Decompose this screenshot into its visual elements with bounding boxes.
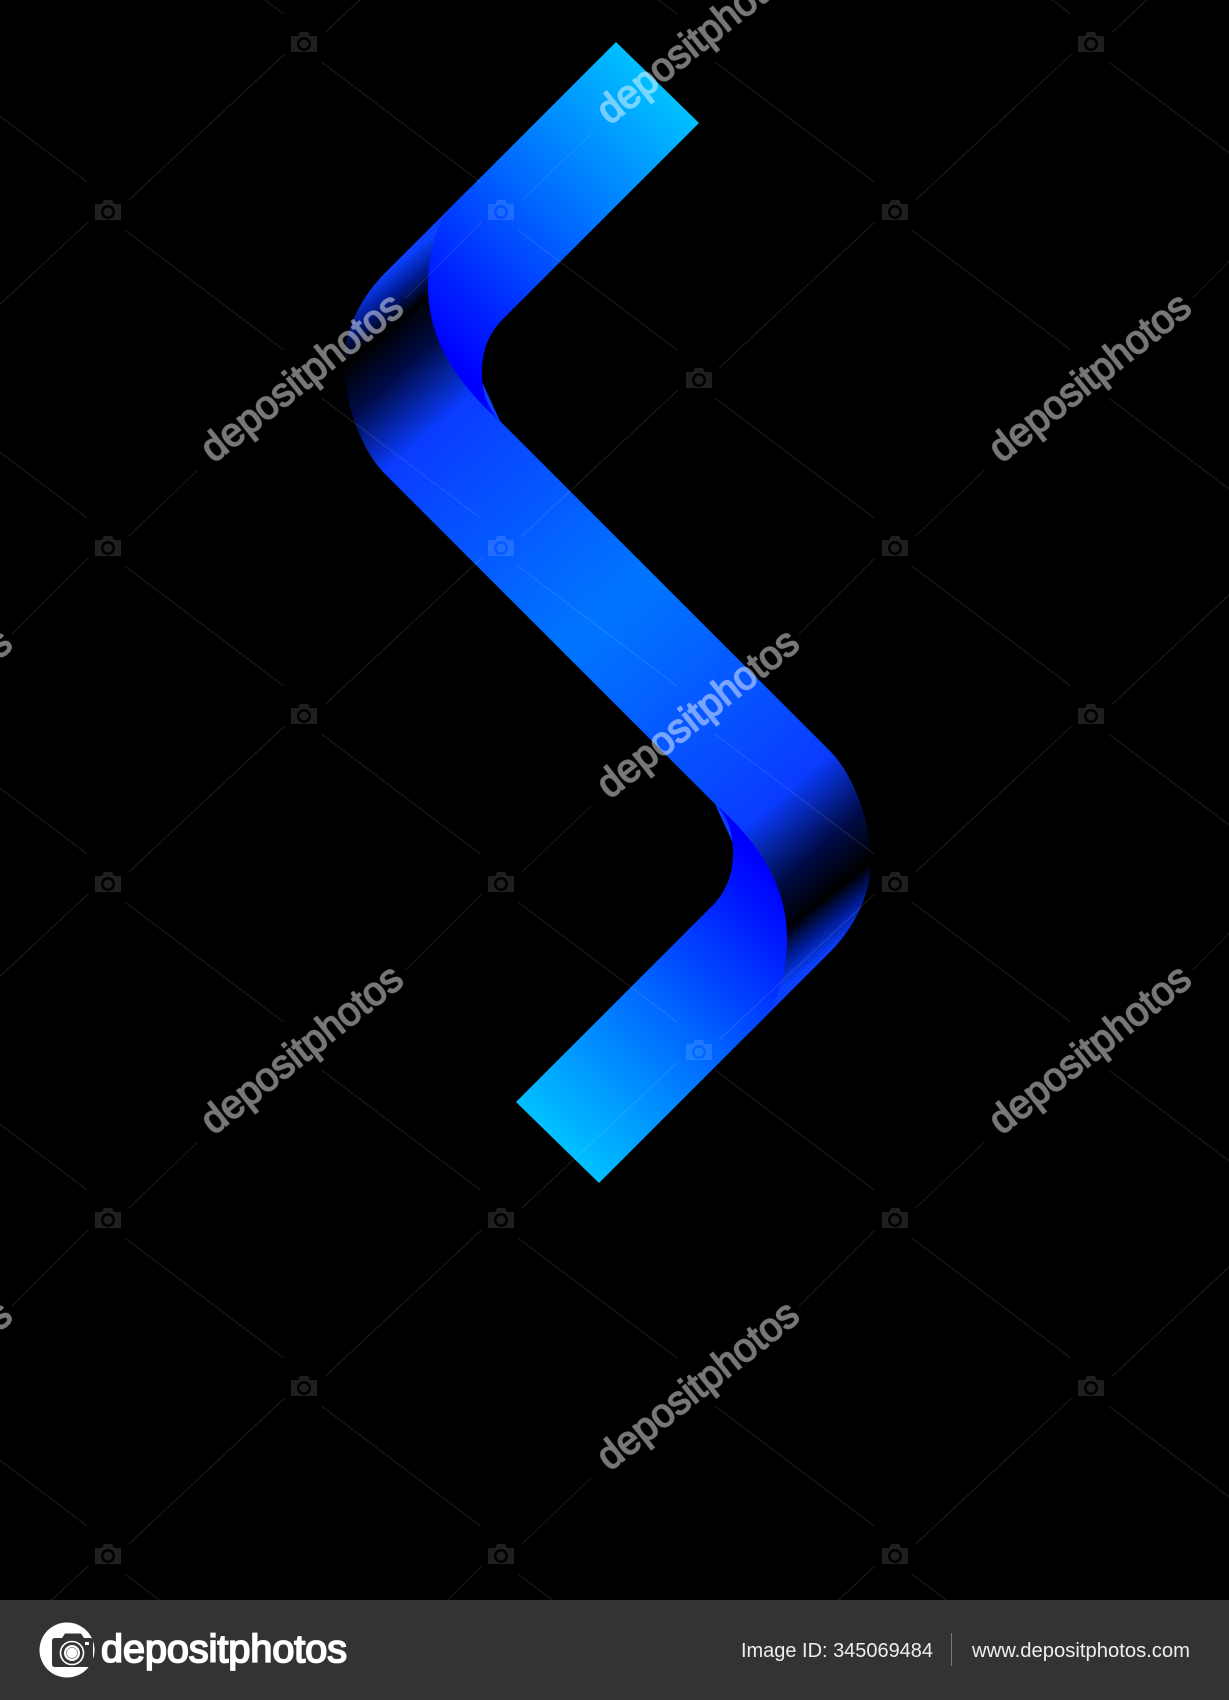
watermark wordmarks: depositphotos [980, 956, 1199, 1143]
front arm, upper [428, 42, 699, 421]
lower half of ribbon [516, 570, 871, 1183]
watermark camera icons [95, 32, 1104, 1564]
back fold, lower [745, 860, 871, 1037]
website address: www.depositphotos.com [971, 1640, 1190, 1662]
front arm, lower [516, 804, 787, 1183]
watermark wordmarks: depositphotos [192, 284, 411, 471]
image id: Image ID: 345069484 [741, 1640, 933, 1662]
middle band, upper half [344, 290, 650, 656]
watermark wordmarks: depositphotos [980, 284, 1199, 471]
ribbon rune [344, 42, 871, 1183]
back fold, upper [344, 188, 470, 365]
watermark wordmarks: depositphotos [588, 620, 807, 807]
footer band [0, 1600, 1229, 1700]
upper half of ribbon [344, 42, 699, 656]
watermark wordmarks: depositphotos [192, 956, 411, 1143]
middle band, lower half [564, 570, 871, 935]
icon: depositphotos camera logo [40, 1622, 94, 1678]
watermark wordmarks: depositphotos [588, 1292, 807, 1479]
footer logo wordmark: depositphotos [101, 1628, 347, 1671]
